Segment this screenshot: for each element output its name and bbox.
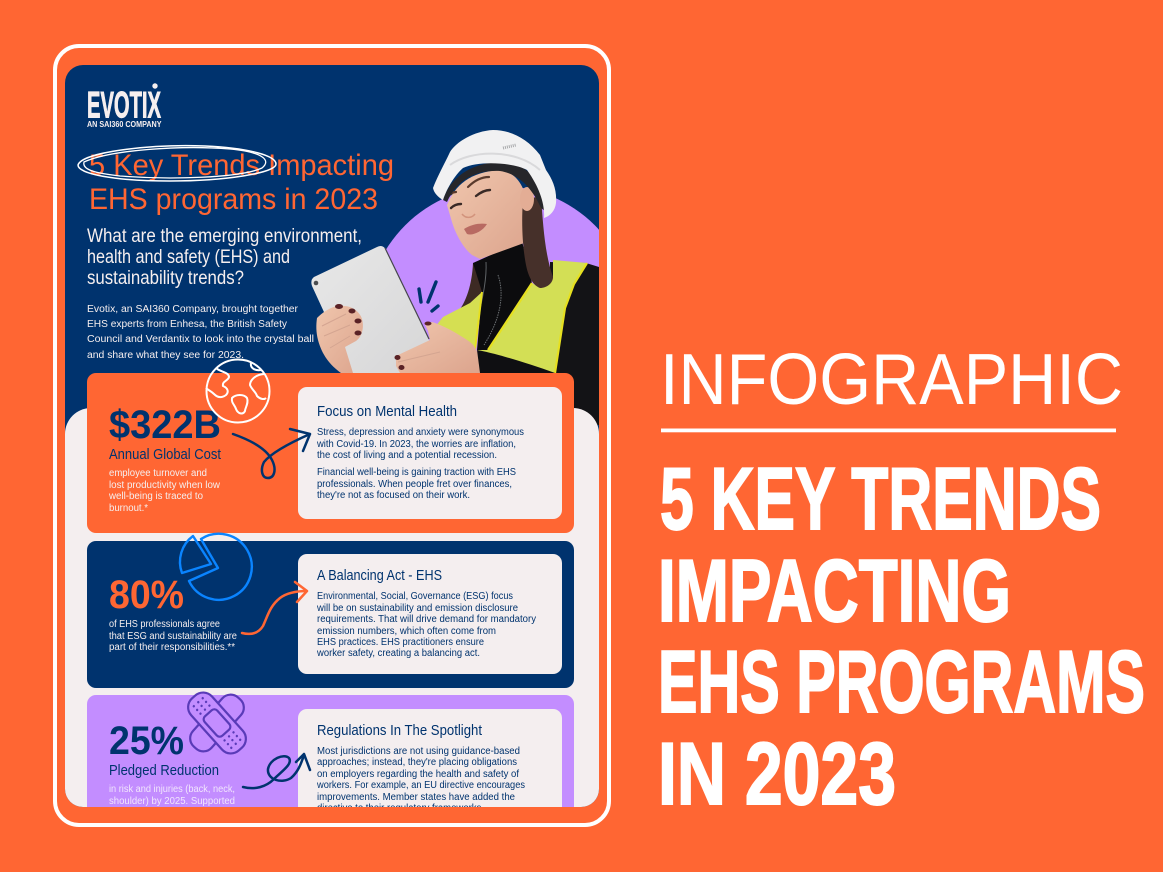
subtitle: health and safety (EHS) and	[87, 247, 290, 268]
hair right side	[522, 196, 553, 288]
body text: approaches; instead, they're placing obligations	[317, 757, 517, 768]
right hand finger lines	[398, 352, 440, 362]
nose shadow	[462, 214, 475, 217]
logo: Evotix: EVOTIX	[87, 84, 161, 126]
black collar and torso	[473, 241, 532, 350]
body text	[316, 591, 536, 659]
icon: globe	[206, 360, 270, 422]
title	[89, 149, 394, 216]
body text: with Covid-19. In 2023, the worries are inflation,	[316, 439, 516, 450]
body text: on employers regarding the health and safety of	[317, 769, 519, 780]
zipper	[481, 262, 487, 306]
sparks icon	[419, 282, 438, 311]
arrow: orange curve	[242, 582, 307, 634]
hat vent	[503, 145, 516, 148]
body text: Stress, depression and anxiety were synonymous	[317, 427, 524, 438]
intro paragraph: Council and Verdantix to look into the crystal ball	[87, 334, 314, 345]
body text: workers. For example, an EU directive encourages	[316, 780, 525, 791]
tablet camera	[314, 281, 318, 285]
body text: emission numbers, which often come from	[317, 626, 496, 637]
body text: improvements. Member states have added the	[317, 792, 515, 803]
logo: Evotix: AN SAI360 COMPANY	[87, 120, 162, 129]
stat description: well-being is traced to	[108, 491, 203, 502]
headline: IN 2023	[658, 724, 896, 823]
body text: EHS practices. EHS practitioners ensure	[317, 637, 484, 648]
photo: worker in hard hat with tablet	[311, 130, 599, 425]
subtitle: What are the emerging environment,	[87, 226, 362, 247]
hair left strand	[460, 262, 482, 308]
icon: pie chart	[180, 534, 252, 600]
right hand	[396, 322, 480, 373]
ear	[522, 187, 534, 211]
black jacket right arm	[550, 262, 599, 425]
stat description	[108, 468, 221, 514]
body text: Financial well-being is gaining traction with EHS	[317, 467, 516, 478]
heading: A Balancing Act - EHS	[317, 568, 442, 584]
tablet edge	[385, 248, 429, 339]
stat description: lost productivity when low	[109, 480, 221, 491]
body text: will be on sustainability and emission disclosure	[316, 603, 518, 614]
stat description: burnout.*	[109, 503, 148, 514]
heading: infographic label: INFOGRAPHIC	[660, 340, 1123, 420]
stat description: in risk and injuries (back, neck,	[109, 784, 235, 795]
body text: Environmental, Social, Governance (ESG) focus	[317, 591, 513, 602]
title: EHS programs in 2023	[89, 183, 378, 216]
stat 25%: 25%	[109, 719, 184, 763]
eyebrows	[447, 177, 489, 198]
arrow: looped navy	[233, 429, 310, 478]
subtitle	[87, 226, 362, 289]
left vest panel	[438, 293, 481, 347]
icon: bandage	[168, 674, 266, 772]
title: 5 Key Trends Impacting	[89, 149, 394, 182]
heading: Focus on Mental Health	[317, 404, 457, 420]
stat description: of EHS professionals agree	[109, 619, 220, 630]
body text: Most jurisdictions are not using guidance-based	[317, 746, 520, 757]
left hand nails	[335, 304, 362, 336]
hand-drawn ellipse around key trends	[78, 146, 276, 181]
stat $322B: $322B	[109, 403, 221, 447]
hat band	[443, 163, 544, 210]
intro paragraph: and share what they see for 2023.	[87, 350, 244, 361]
subtitle: sustainability trends?	[87, 268, 244, 289]
arrow: squiggle navy	[243, 754, 310, 788]
heading: Regulations In The Spotlight	[317, 723, 482, 739]
body text: the cost of living and a potential recession.	[317, 450, 497, 461]
left hand	[316, 306, 363, 373]
cream lower background	[65, 408, 599, 828]
body text	[316, 746, 525, 814]
stat description: shoulder) by 2025. Supported	[109, 796, 235, 807]
stat description: part of their responsibilities.**	[109, 642, 235, 653]
intro paragraph: Evotix, an SAI360 Company, brought together	[87, 304, 299, 315]
finger lines	[322, 314, 350, 348]
purple circle behind worker	[386, 188, 599, 352]
body text: directive to their regulatory frameworks.	[317, 803, 484, 814]
white tablet frame	[55, 46, 609, 825]
stat 80%: 80%	[109, 573, 184, 617]
headline: IMPACTING	[658, 541, 1011, 640]
stat description	[109, 619, 237, 653]
tablet	[311, 246, 429, 373]
lips	[464, 224, 487, 235]
logo: Evotix	[87, 83, 162, 129]
body text: worker safety, creating a balancing act.	[316, 648, 480, 659]
intro paragraph: EHS experts from Enhesa, the British Safety	[87, 319, 287, 330]
hard hat	[433, 130, 556, 218]
eyes	[451, 190, 490, 208]
stat description	[109, 784, 235, 807]
body text: requirements. That will drive demand for mandatory	[317, 614, 536, 625]
right hand nails	[394, 322, 432, 370]
body text: professionals. When people fret over finances,	[317, 479, 512, 490]
body text	[316, 427, 524, 501]
hat shading	[450, 154, 540, 170]
right vest panel	[477, 260, 587, 373]
stat label: Annual Global Cost	[109, 447, 221, 463]
panel: infographic preview	[65, 65, 634, 829]
stat description: employee turnover and	[109, 468, 207, 479]
face and neck	[447, 170, 527, 259]
body text: they're not as focused on their work.	[317, 490, 470, 501]
stat label: Pledged Reduction	[109, 763, 219, 779]
stat description: that ESG and sustainability are	[109, 631, 237, 642]
inner card	[298, 554, 562, 674]
divider rule	[661, 428, 1116, 432]
headline	[658, 449, 1145, 823]
inner card	[298, 709, 562, 829]
panel: card 1 mental health	[87, 373, 574, 533]
inner card	[298, 387, 562, 519]
panel: card 3 regulations	[87, 695, 574, 829]
intro paragraph	[87, 304, 314, 361]
panel: card 2 balancing act	[87, 541, 574, 688]
black sleeve	[477, 350, 555, 373]
